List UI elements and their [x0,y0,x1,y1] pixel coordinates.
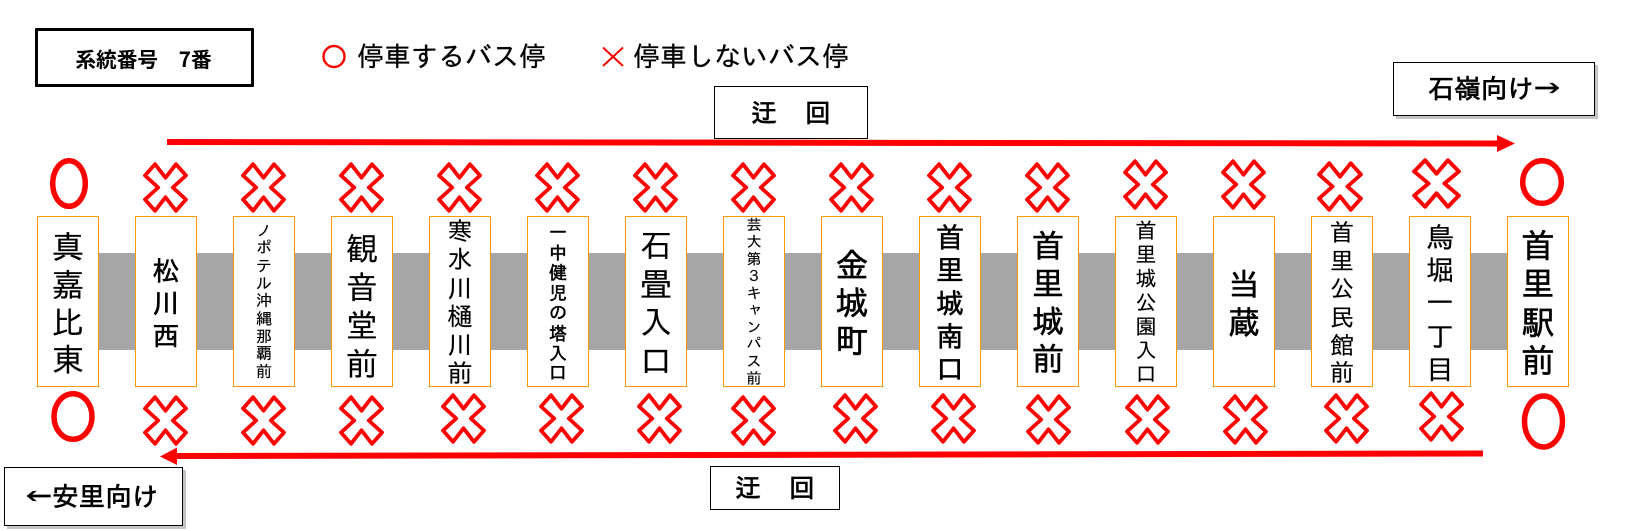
stop: 観音堂前 [331,216,393,387]
stop: 当蔵: 当蔵 [1228,267,1260,344]
stop: 首里城南口 [919,216,981,387]
stop: 石畳入口: 石畳入口 [640,229,672,382]
stop: 首里城前 [1017,216,1079,387]
route number box [35,28,254,87]
stop: 一中健児の塔入口: 一中健児の塔入口 [549,223,567,383]
stop: 寒水川樋川前 [429,216,491,387]
stop: 石畳入口 [625,216,687,387]
stop: 松川西: 松川西 [152,256,179,354]
stop: ノポテル沖縄那覇前 [233,216,295,387]
legend: non-stopping bus stop text: 停車しないバス停 [633,43,849,70]
detour label: top [714,86,868,139]
stop: 首里駅前 [1507,216,1569,387]
stop: 首里城南口: 首里城南口 [936,222,964,387]
legend: stopping bus stop text: 停車するバス停 [357,43,546,70]
stop: 真嘉比東: 真嘉比東 [52,230,84,380]
direction label: Ishimine: 石嶺向け→ [1428,76,1560,102]
legend: circle mark [324,46,344,67]
stop: 真嘉比東 [37,216,99,387]
stop: 当蔵 [1213,216,1275,387]
cross marks: top row [145,160,1459,211]
stop: 首里城公園入口 [1115,216,1177,387]
stop: 寒水川樋川前: 寒水川樋川前 [447,218,472,389]
direction label: Asato [4,467,183,526]
stop: 鳥堀一丁目: 鳥堀一丁目 [1426,222,1454,387]
stop: 首里駅前: 首里駅前 [1521,228,1554,381]
stop: 金城町 [821,216,883,387]
stop: 首里城公園入口: 首里城公園入口 [1135,219,1156,387]
detour label: bottom [710,466,840,510]
cross marks: bottom row [145,393,1462,444]
stop: 観音堂前: 観音堂前 [346,232,378,385]
route band [60,253,1540,350]
detour label: top: 迂回 [751,100,859,126]
stop: 首里公民館前 [1311,216,1373,387]
arrow: outbound detour [167,135,1515,152]
legend: cross mark [603,48,623,66]
stop: 鳥堀一丁目 [1409,216,1471,387]
direction label: Ishimine [1393,62,1595,116]
detour label: bottom: 迂回 [735,475,843,501]
stop: 一中健児の塔入口 [527,216,589,387]
direction label: Asato: ←安里向け [26,484,158,510]
stop: ノポテル沖縄那覇前: ノポテル沖縄那覇前 [256,222,272,379]
stop: 芸大第3キャンパス前 [723,216,785,387]
stop: 金城町: 金城町 [835,248,868,361]
stop: 松川西 [135,216,197,387]
route number box: 系統番号 7番 [75,42,212,72]
stop: 首里城前: 首里城前 [1032,229,1064,380]
arrow: inbound detour [160,448,1483,465]
stop: 首里公民館前: 首里公民館前 [1330,220,1354,388]
circle marks: top and bottom terminals [53,161,1563,447]
stop: 芸大第3キャンパス前: 芸大第３キャンパス前 [746,217,761,387]
